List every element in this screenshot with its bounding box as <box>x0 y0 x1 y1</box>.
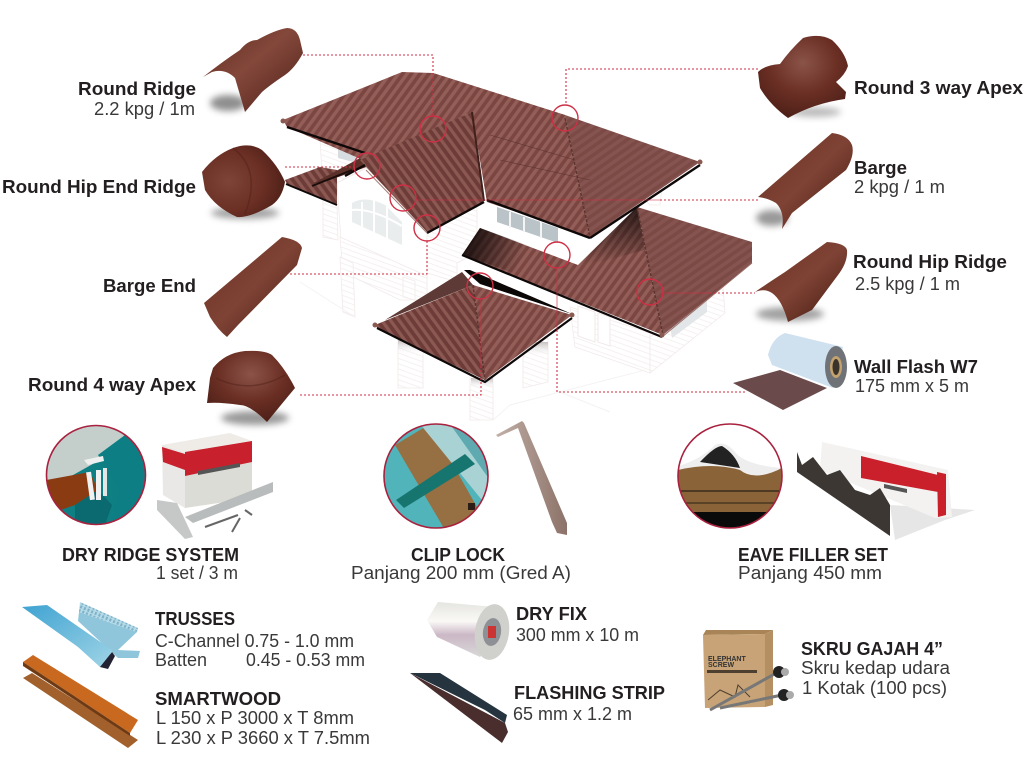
label: round hip ridge: Round Hip Ridge <box>853 251 1007 272</box>
photo circle: eave filler <box>678 424 782 532</box>
ground lines <box>300 282 645 420</box>
product: dry ridge box and parts <box>157 433 273 539</box>
label: round hip end ridge: Round Hip End Ridge <box>2 176 196 197</box>
label: smartwood: L 150 x P 3000 x T 8mm <box>156 708 354 728</box>
product: skru gajah box and screws: ELEPHANT <box>708 656 746 663</box>
label: round ridge <box>78 78 196 119</box>
label: dry fix <box>516 603 639 645</box>
label: barge <box>854 157 945 197</box>
label: flashing strip <box>513 682 665 724</box>
porch roof <box>372 270 574 382</box>
product: skru gajah box and screws: SCREW <box>708 662 734 669</box>
label: eave filler set <box>738 544 889 583</box>
label: round ridge: Round Ridge <box>78 78 196 99</box>
small left roof <box>285 158 372 205</box>
label: round hip ridge: 2.5 kpg / 1 m <box>855 274 960 294</box>
label: round ridge: 2.2 kpg / 1m <box>94 99 195 119</box>
label: dry ridge system: DRY RIDGE SYSTEM <box>62 544 239 565</box>
label: round 4 way apex: Round 4 way Apex <box>28 374 197 395</box>
label: eave filler set: Panjang 450 mm <box>738 563 882 583</box>
label: skru gajah <box>801 638 951 698</box>
label: smartwood <box>155 688 370 748</box>
product: smartwood <box>23 655 138 748</box>
tile: barge <box>756 133 853 229</box>
label: trusses: TRUSSES <box>155 608 235 629</box>
house walls <box>320 140 725 420</box>
product: eave filler set <box>797 442 975 540</box>
label: barge end: Barge End <box>103 275 196 296</box>
product: trusses <box>22 602 140 669</box>
photo circle: dry ridge <box>46 425 146 525</box>
dotted leader lines <box>285 55 758 395</box>
tile: round hip ridge <box>755 242 847 322</box>
post shadows <box>398 340 548 400</box>
label: eave filler set: EAVE FILLER SET <box>738 544 889 565</box>
label: round hip ridge <box>853 251 1007 294</box>
label: barge: Barge <box>854 157 907 178</box>
lower right roof <box>462 207 752 338</box>
label: dry ridge system <box>62 544 239 583</box>
product: flashing strip <box>410 673 508 743</box>
tile: round hip end ridge <box>202 145 285 219</box>
main roof <box>280 72 702 238</box>
label: skru gajah: 1 Kotak (100 pcs) <box>802 678 947 698</box>
upper window band <box>497 207 558 243</box>
label: barge: 2 kpg / 1 m <box>854 177 945 197</box>
product: wall flash roll <box>733 333 847 410</box>
label: wall flash: Wall Flash W7 <box>854 356 978 377</box>
house illustration <box>280 72 752 420</box>
label: clip lock: CLIP LOCK <box>411 544 506 565</box>
label: clip lock: Panjang 200 mm (Gred A) <box>351 563 571 583</box>
label: smartwood: SMARTWOOD <box>155 688 281 709</box>
wall above lower roof <box>480 201 600 265</box>
tile: barge end <box>204 237 302 337</box>
product: clip lock <box>496 421 567 535</box>
label: smartwood: L 230 x P 3660 x T 7.5mm <box>156 728 370 748</box>
label: trusses: 0.45 - 0.53 mm <box>246 650 365 670</box>
label: trusses <box>155 608 365 670</box>
windows <box>338 147 707 346</box>
label: dry fix: DRY FIX <box>516 603 588 624</box>
label: flashing strip: FLASHING STRIP <box>514 682 665 703</box>
product: skru gajah box and screws <box>703 630 794 710</box>
front gable roof <box>345 112 484 233</box>
label: clip lock <box>351 544 571 583</box>
label: skru gajah: SKRU GAJAH 4” <box>801 638 943 659</box>
label: round 3 way apex: Round 3 way Apex <box>854 77 1024 98</box>
label: dry fix: 300 mm x 10 m <box>516 625 639 645</box>
label: trusses: C-Channel 0.75 - 1.0 mm <box>155 631 354 651</box>
label: trusses: Batten <box>155 650 207 670</box>
tile: round ridge <box>203 28 303 112</box>
callout circles <box>354 105 663 305</box>
label: wall flash <box>854 356 978 396</box>
label: skru gajah: Skru kedap udara <box>801 658 951 678</box>
label: wall flash: 175 mm x 5 m <box>855 376 969 396</box>
photo circle: clip lock <box>384 424 490 530</box>
label: flashing strip: 65 mm x 1.2 m <box>513 704 632 724</box>
tile: round 3 way apex <box>758 36 848 118</box>
product: dry fix roll <box>427 602 513 662</box>
label: dry ridge system: 1 set / 3 m <box>156 563 238 583</box>
tile: round 4 way apex <box>207 351 295 425</box>
